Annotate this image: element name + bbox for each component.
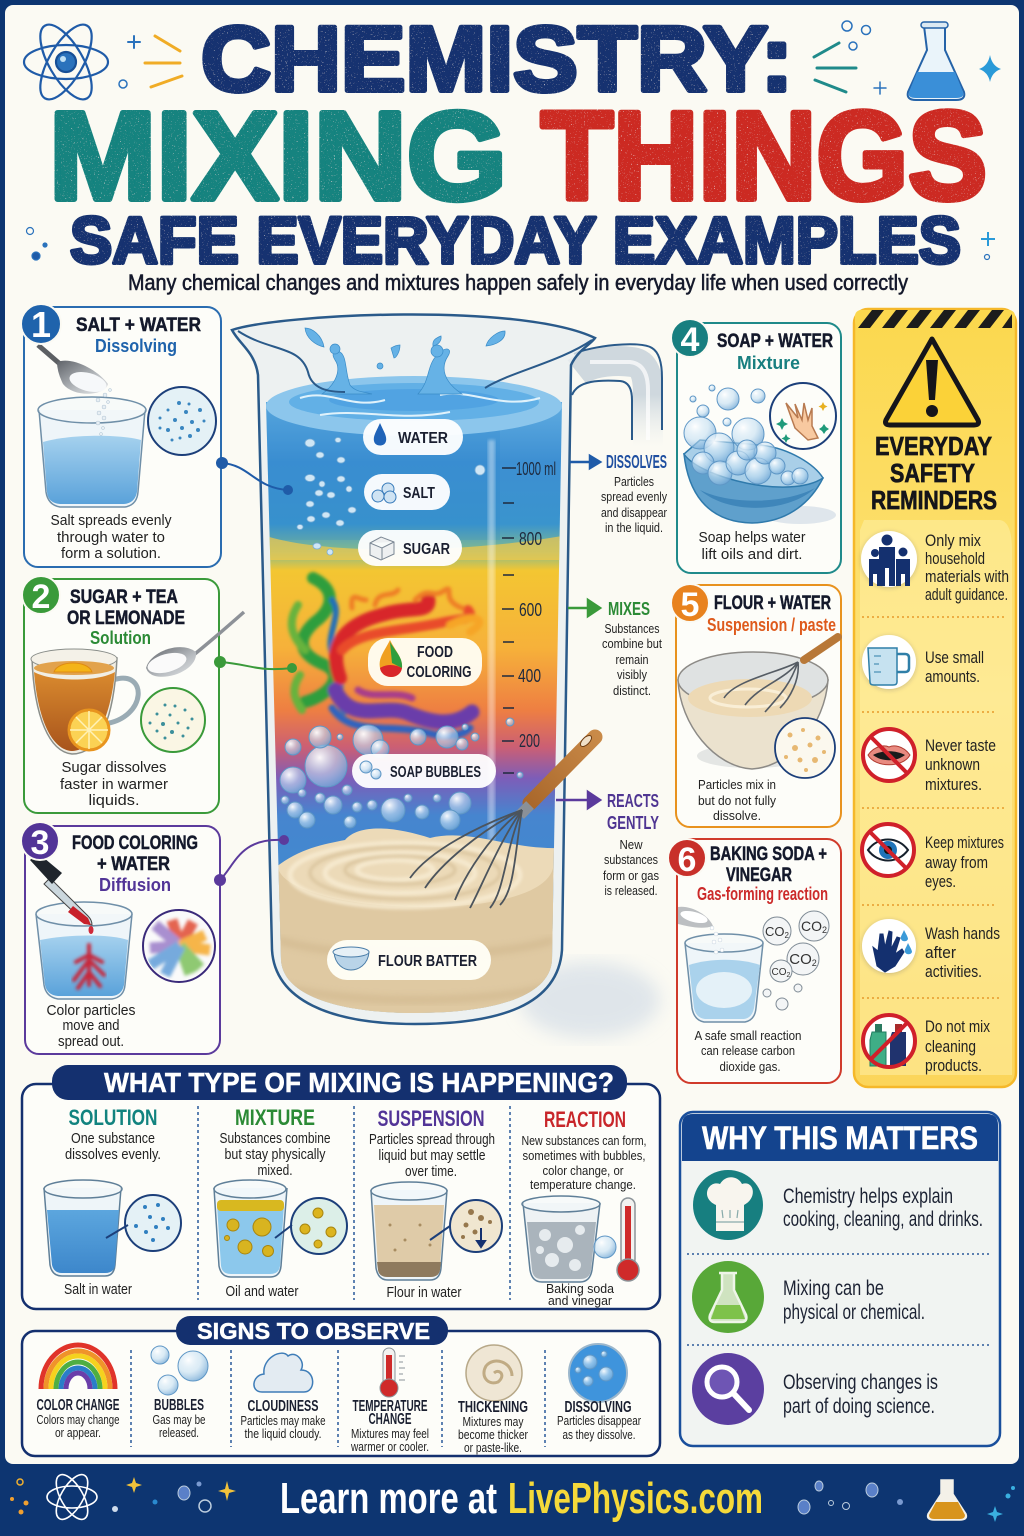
reminder: do not mix cleaners: products. [925,1056,982,1075]
sign: temperature change: TEMPERATURE [352,1398,428,1415]
reminder: keep away from eyes: away from [925,853,988,872]
pill: salt [364,474,450,510]
column: mixture: mixed. [258,1163,292,1179]
panel 5: flour + water [671,584,841,827]
panel 1 caption: Salt spreads evenly [50,513,172,529]
signs header pill: SIGNS TO OBSERVE [197,1318,430,1344]
item: magnifier: Observing changes is [783,1371,938,1394]
arrow callout: mixes: visibly [617,667,647,682]
arrow callout: mixes: combine but [602,636,662,651]
panel 4 heading: SOAP + WATER [717,331,833,352]
reminder: adult guidance: Only mix [925,531,981,550]
panel 2 caption: liquids. [88,793,140,809]
sign: color change [36,1345,120,1440]
arrow callout: dissolves [570,452,668,535]
hazard stripes [855,310,1015,328]
magnifier: sugar [141,688,205,752]
badge 5: 5 [681,586,699,624]
icon: warning triangle [886,339,978,425]
panel 4 caption [698,530,806,563]
sign: temperature change: warmer or cooler. [350,1440,429,1454]
column: suspension: SUSPENSION [378,1106,484,1131]
footer band [0,1466,1024,1536]
scale numbers: 1000 ml [516,459,556,479]
panel 3 caption [46,1003,136,1050]
reminder: never taste: unknown [925,755,980,774]
pill: salt: SALT [403,485,435,502]
item: cooking: Chemistry helps explain [783,1185,953,1208]
panel 6 heading [697,844,828,904]
sign: temperature change [350,1348,429,1454]
panel 4 heading [717,331,833,373]
icon: glass with salt [38,345,146,507]
jug handle [572,344,662,447]
connector lines [214,457,297,886]
sign: thickening [458,1345,528,1455]
sign: cloudiness: CLOUDINESS [248,1398,319,1415]
water surface [266,376,562,436]
sign: dissolving [557,1344,641,1442]
pill: water [363,419,463,455]
badge 4 [671,319,709,359]
pill: food coloring [368,638,482,686]
column: solution: One substance [71,1131,155,1147]
salt specks [297,438,485,555]
pill: sugar [358,530,462,566]
panel 3 heading: FOOD COLORING [72,833,198,854]
panel: why this matters [680,1112,1000,1446]
arrow callout: mixes: MIXES [608,599,650,619]
icon: mixing bowl with whisk [678,637,838,769]
panel 2 caption: Sugar dissolves [62,760,166,776]
footer decoration right [798,1481,1015,1522]
sign: bubbles [151,1346,208,1440]
reminder: wash hands [862,919,1000,981]
pill: food coloring: FOOD [417,644,453,661]
panel 1 heading: Dissolving [95,336,177,356]
panel 6 caption: can release carbon [701,1043,795,1058]
panel 2 caption [60,760,168,809]
panel 3 heading [72,833,198,895]
icon: flask [908,22,964,100]
title line 1: CHEMISTRY: [201,8,793,110]
column: reaction: REACTION [544,1107,626,1132]
co2 bubbles: CO [772,967,787,978]
badge 1: 1 [31,304,51,345]
panel 1 caption: through water to [57,530,165,546]
column: solution: SOLUTION [68,1105,158,1130]
reminder: never taste: Never taste [925,736,996,755]
column: reaction [522,1107,646,1308]
reminder: never taste: mixtures. [925,775,982,794]
badge 6 [668,839,706,879]
panel 2 caption: faster in warmer [60,777,168,793]
why header: WHY THIS MATTERS [702,1120,978,1156]
icon: oil water glass [214,1180,347,1277]
sign: thickening: or paste-like. [464,1441,522,1455]
badge 3 [21,822,59,862]
pill: flour batter [327,940,491,980]
panel 2: sugar + tea [22,576,244,813]
scale numbers: 200 [519,731,540,751]
arrow callout: reacts gently: is released. [604,883,658,898]
footer text: LivePhysics.com [508,1474,763,1523]
panel 2 heading: Solution [90,628,151,648]
panel 6 caption [694,1028,802,1074]
panel 5 heading [707,593,836,635]
panel 1 caption [50,513,172,562]
panel 6 heading: Gas-forming reaction [697,884,828,904]
sign: dissolving: as they dissolve. [562,1428,636,1442]
batter [278,828,554,1013]
sign: cloudiness: Particles may make [240,1414,326,1428]
co2 bubbles: CO [765,924,785,939]
item: cooking [693,1170,983,1240]
badge 5 [671,584,709,624]
water splash [305,328,505,394]
deco dots [26,228,995,260]
panel 5 heading: FLOUR + WATER [714,593,831,614]
panel 1 heading: SALT + WATER [76,315,201,336]
icon: fizzing glass with thermometer [522,1196,639,1282]
scale numbers [516,459,556,751]
arrow callout: mixes [568,599,662,698]
header pill: WHAT TYPE OF MIXING IS HAPPENING? [104,1067,614,1098]
item: flask [692,1261,925,1333]
footer text: Learn more at [280,1474,497,1523]
title line 2: mixing: MIXING [49,87,507,226]
panel 5 caption: dissolve. [713,808,761,823]
column: suspension: Particles spread through [369,1132,495,1148]
co2 bubbles: CO [801,918,822,934]
magnifier: particles [148,387,216,455]
arrow callout: dissolves: spread evenly [601,489,667,504]
footer flask icon [928,1480,966,1520]
panel 1 heading [76,315,201,356]
glass front rim [238,331,592,392]
panel 5 caption: Particles mix in [698,777,776,792]
shadow under beaker [520,962,660,1038]
icon: tea cup with lemon [31,649,138,754]
panel 6 caption: dioxide gas. [720,1059,780,1074]
column: solution: Salt in water [64,1282,132,1298]
panel 3 caption: Color particles [46,1003,136,1019]
arrow callout: reacts gently: New [620,837,643,852]
footer atom icon [47,1470,97,1524]
sign: color change: Colors may change [36,1413,120,1427]
arrow callout: mixes: distinct. [613,683,651,698]
co2 bubbles: CO [789,951,812,968]
panel 1: salt + water [21,304,221,567]
sign: color change: or appear. [55,1426,101,1440]
column: reaction: and vinegar [548,1294,612,1308]
column: reaction: sometimes with bubbles, [522,1149,646,1163]
column: mixture: MIXTURE [235,1105,315,1130]
item: flask: Mixing can be [783,1277,884,1300]
panel 2 heading: OR LEMONADE [67,608,185,629]
reminder: wash hands: activities. [925,962,982,981]
panel 3 heading: + WATER [97,854,170,875]
soap bubbles [280,718,523,830]
scale numbers: 400 [518,666,541,686]
icon: sparkle [979,55,1001,82]
reminder: keep away from eyes [861,823,1004,891]
safety heading: EVERYDAY [875,431,992,461]
icon: atom [24,17,108,107]
icon: soap dish with bubbles [684,385,836,524]
panel 5 caption: but do not fully [698,793,776,808]
sign: cloudiness: the liquid cloudy. [244,1427,322,1441]
column: mixture: Oil and water [226,1284,299,1300]
sign: bubbles: released. [159,1426,199,1440]
column: reaction: New substances can form, [522,1134,646,1148]
why header [682,1114,998,1161]
panel 1 caption: form a solution. [61,546,161,562]
arrow callout: reacts gently: form or gas [603,868,659,883]
column: suspension: Flour in water [386,1285,462,1301]
icon: spoon with sugar [145,612,244,677]
icon: fizzing glass [678,907,763,1022]
title line 2: things: THINGS [541,87,987,226]
reminder: do not mix cleaners [862,1014,990,1075]
safety heading: REMINDERS [871,485,997,515]
panel 5 caption [698,777,776,823]
magnifier: flour particles [775,718,835,778]
co2 bubbles: 2 [787,972,791,979]
sign: bubbles: BUBBLES [154,1397,204,1414]
panel 6 heading: BAKING SODA + [710,844,827,865]
sign: dissolving: DISSOLVING [564,1399,632,1416]
icon: glass with dropper [30,853,132,999]
sign: temperature change: Mixtures may feel [351,1427,429,1441]
arrow callout: reacts gently: substances [604,852,658,867]
panel 2 heading [67,587,185,648]
reminder: never taste [862,728,996,794]
panel 4 caption: Soap helps water [698,530,806,546]
decorative sparks right [814,21,886,94]
liquid layers [260,400,570,1020]
subtitle: Many chemical changes and mixtures happen safely in everyday life when used correctly [128,270,908,295]
reminder: adult guidance [861,531,1009,604]
panel 3 caption: move and [62,1018,120,1034]
food coloring swirls [292,578,479,736]
title line 3: SAFE EVERYDAY EXAMPLES [70,203,961,277]
sign: thickening: become thicker [458,1428,528,1442]
pill: flour batter: FLOUR BATTER [378,953,477,970]
co2 bubbles: 2 [822,925,827,935]
panel 2 heading: SUGAR + TEA [70,587,178,608]
jug glass body [232,314,595,1024]
panel 3 caption: spread out. [58,1034,124,1050]
pill: soap bubbles: SOAP BUBBLES [390,764,481,781]
sign: thickening: Mixtures may [462,1415,524,1429]
panel: what type of mixing [22,1065,660,1309]
footer decoration left [10,1477,236,1514]
panel 4: soap + water [671,319,841,573]
reminder: adult guidance: household [925,549,985,568]
icon: salt water glass [44,1180,181,1276]
footer text [280,1474,763,1523]
pill: sugar: SUGAR [403,541,450,558]
sign: cloudiness [240,1353,326,1441]
column: reaction: temperature change. [530,1178,636,1192]
scale numbers: 800 [519,529,542,549]
badge 2 [22,576,60,616]
panel 6 heading: VINEGAR [726,865,792,886]
item: magnifier: part of doing science. [783,1395,935,1418]
column: solution: dissolves evenly. [65,1147,161,1163]
badge 6: 6 [678,841,696,879]
scale ticks [502,468,516,773]
column: mixture [214,1105,347,1300]
panel 6 caption: A safe small reaction [694,1028,802,1043]
reminder: do not mix cleaners: Do not mix [925,1017,990,1036]
badge 3: 3 [31,824,49,862]
sign: thickening: THICKENING [458,1399,528,1416]
badge 2: 2 [32,578,50,616]
arrow callout: mixes: remain [616,652,648,667]
column: suspension [369,1106,502,1301]
column: reaction: color change, or [542,1164,624,1178]
arrow callout: reacts gently [556,791,659,898]
reminder: small amounts [862,635,984,689]
reminder: do not mix cleaners: cleaning [925,1037,976,1056]
column: suspension: over time. [405,1164,457,1180]
scale numbers: 600 [519,600,542,620]
arrow callout: dissolves: in the liquid. [605,520,663,535]
sign: bubbles: Gas may be [152,1413,206,1427]
column: mixture: Substances combine [220,1131,330,1147]
pill: food coloring: COLORING [406,664,472,681]
safety heading: SAFETY [890,458,975,488]
sign: color change: COLOR CHANGE [36,1397,120,1414]
reminder: small amounts: amounts. [925,667,980,686]
sign: temperature change: CHANGE [368,1411,412,1428]
pill: soap bubbles [352,754,496,788]
item: magnifier [692,1353,938,1425]
panel 4 caption: lift oils and dirt. [702,547,802,563]
co2 bubbles: 2 [785,931,790,940]
magnifier: rainbow diffusion [143,910,215,982]
safety heading [871,431,997,515]
arrow callout: dissolves: Particles [614,474,654,489]
panel: signs to observe [22,1316,660,1456]
arrow callout: reacts gently: REACTS [607,791,659,811]
pill: water: WATER [398,430,448,447]
panel: safety reminders [854,309,1016,1087]
whisk [410,734,595,908]
badge 1 [21,304,61,345]
column: reaction: Baking soda [546,1282,614,1296]
reminder: wash hands: Wash hands [925,924,1000,943]
icon: flour water glass [371,1182,502,1280]
panel 4 heading: Mixture [737,353,800,373]
reminder: wash hands: after [925,943,956,962]
panel 3 heading: Diffusion [99,875,171,895]
panel 3: food coloring + water [21,822,220,1054]
arrow callout: mixes: Substances [604,621,660,636]
panel 6: baking soda + vinegar [668,839,841,1083]
reminder: keep away from eyes: eyes. [925,872,956,891]
magnifier: clean hand [770,383,836,449]
arrow callout: reacts gently: GENTLY [607,813,659,833]
panel 5 heading: Suspension / paste [707,615,836,635]
arrow callout: dissolves: DISSOLVES [606,452,667,472]
co2 bubbles [763,911,829,1010]
arrow callout: dissolves: and disappear [601,505,668,520]
decorative sparks left [119,36,182,88]
column: solution [44,1105,181,1298]
badge 4: 4 [681,321,700,359]
item: flask: physical or chemical. [783,1301,925,1324]
sign: dissolving: Particles disappear [557,1414,641,1428]
co2 bubbles: 2 [812,958,817,968]
column: mixture: but stay physically [224,1147,326,1163]
column: suspension: liquid but may settle [378,1148,486,1164]
reminder: small amounts: Use small [925,648,984,667]
